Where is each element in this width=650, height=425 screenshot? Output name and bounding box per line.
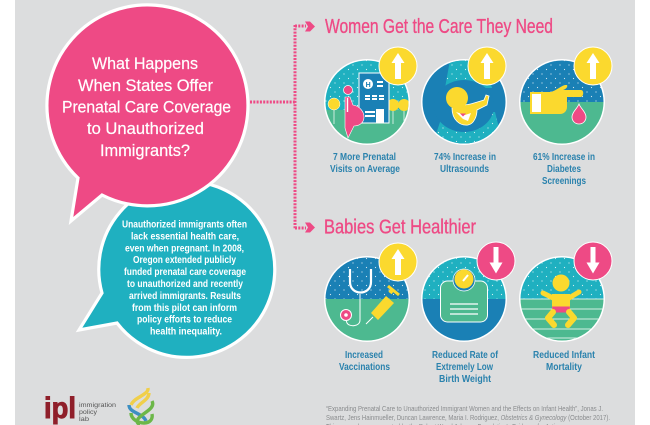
context paragraph: even when pregnant. In 2008, [125, 242, 244, 254]
caption: prenatal visits: 7 More Prenatal [333, 151, 396, 163]
icon: stethoscope and syringe [324, 256, 410, 342]
logo: immigration policy lab: lab [79, 416, 89, 423]
badge: up arrow [379, 47, 417, 85]
title question: Immigrants? [100, 141, 190, 160]
caption: diabetes screenings: 61% Increase in [533, 151, 595, 163]
context paragraph: from this pilot can inform [132, 302, 237, 314]
badge: up arrow [468, 47, 506, 85]
teal bubble shape [79, 181, 275, 357]
caption: vaccinations: Vaccinations [339, 361, 390, 373]
caption: birth weight: Extremely Low [436, 361, 494, 373]
caption: prenatal visits [330, 151, 400, 175]
badge: up arrow [574, 47, 612, 85]
heading: babies: Babies Get Healthier [324, 216, 476, 238]
heading: women: Women Get the Care They Need [325, 15, 553, 38]
logo: foundation swirl [129, 388, 153, 424]
context paragraph: health inequality. [150, 326, 222, 338]
caption: infant mortality [533, 349, 595, 373]
citation text [326, 404, 610, 425]
caption: birth weight [432, 349, 498, 385]
pink bubble shape [47, 5, 248, 221]
panel: pink question speech bubble [47, 5, 248, 221]
icon: weight scale [420, 255, 510, 344]
caption: diabetes screenings: Screenings [542, 175, 586, 187]
context paragraph: lack essential health care, [131, 230, 239, 242]
context paragraph: Oregon extended publicly [133, 254, 236, 266]
title question: to Unauthorized [87, 119, 204, 138]
title question: When States Offer [78, 76, 213, 95]
title question: Prenatal Care Coverage [62, 98, 231, 116]
citation text: Swartz, Jens Hainmueller, Duncan Lawrence, Maria I. Rodriguez, Obstetrics & Gynecology (October 2017). [326, 413, 610, 422]
connector: dotted lines to section headings [250, 25, 306, 229]
context paragraph: policy efforts to reduce [137, 314, 232, 326]
title question [62, 54, 231, 160]
logo: immigration policy lab [44, 392, 116, 425]
context paragraph: arrived immigrants. Results [129, 290, 241, 302]
logo: immigration policy lab: ipl [44, 392, 76, 425]
badge: up arrow [379, 243, 417, 281]
caption: infant mortality: Reduced Infant [533, 349, 595, 361]
panel: teal context speech bubble [79, 181, 275, 357]
arrow: to first heading [305, 22, 315, 32]
caption: prenatal visits: Visits on Average [330, 163, 400, 175]
context paragraph: to unauthorized and recently [127, 278, 243, 290]
badge: down arrow [477, 242, 515, 280]
title question: What Happens [92, 54, 198, 73]
context paragraph [122, 218, 247, 338]
icon: fetus ultrasound [421, 59, 507, 145]
icon: hospital and pregnant woman [324, 59, 410, 145]
logo: immigration policy lab: immigration [79, 402, 116, 409]
icon: baby [519, 256, 605, 342]
caption: infant mortality: Mortality [546, 361, 582, 373]
caption: ultrasounds: Ultrasounds [440, 163, 489, 175]
logo: immigration policy lab: policy [79, 409, 98, 416]
caption: diabetes screenings: Diabetes [547, 163, 581, 175]
badge: down arrow [574, 242, 612, 280]
context paragraph: Unauthorized immigrants often [122, 218, 247, 230]
icon: pointing hand and blood drop [519, 59, 605, 145]
arrow: to second heading [305, 222, 315, 232]
caption: vaccinations [339, 349, 390, 373]
context paragraph: funded prenatal care coverage [124, 266, 246, 278]
caption: ultrasounds [434, 151, 496, 175]
caption: ultrasounds: 74% Increase in [434, 151, 496, 163]
caption: vaccinations: Increased [345, 349, 383, 361]
caption: birth weight: Reduced Rate of [432, 349, 498, 361]
caption: diabetes screenings [533, 151, 595, 187]
icon: hospital and pregnant woman: H [366, 82, 371, 89]
caption: birth weight: Birth Weight [439, 373, 491, 385]
